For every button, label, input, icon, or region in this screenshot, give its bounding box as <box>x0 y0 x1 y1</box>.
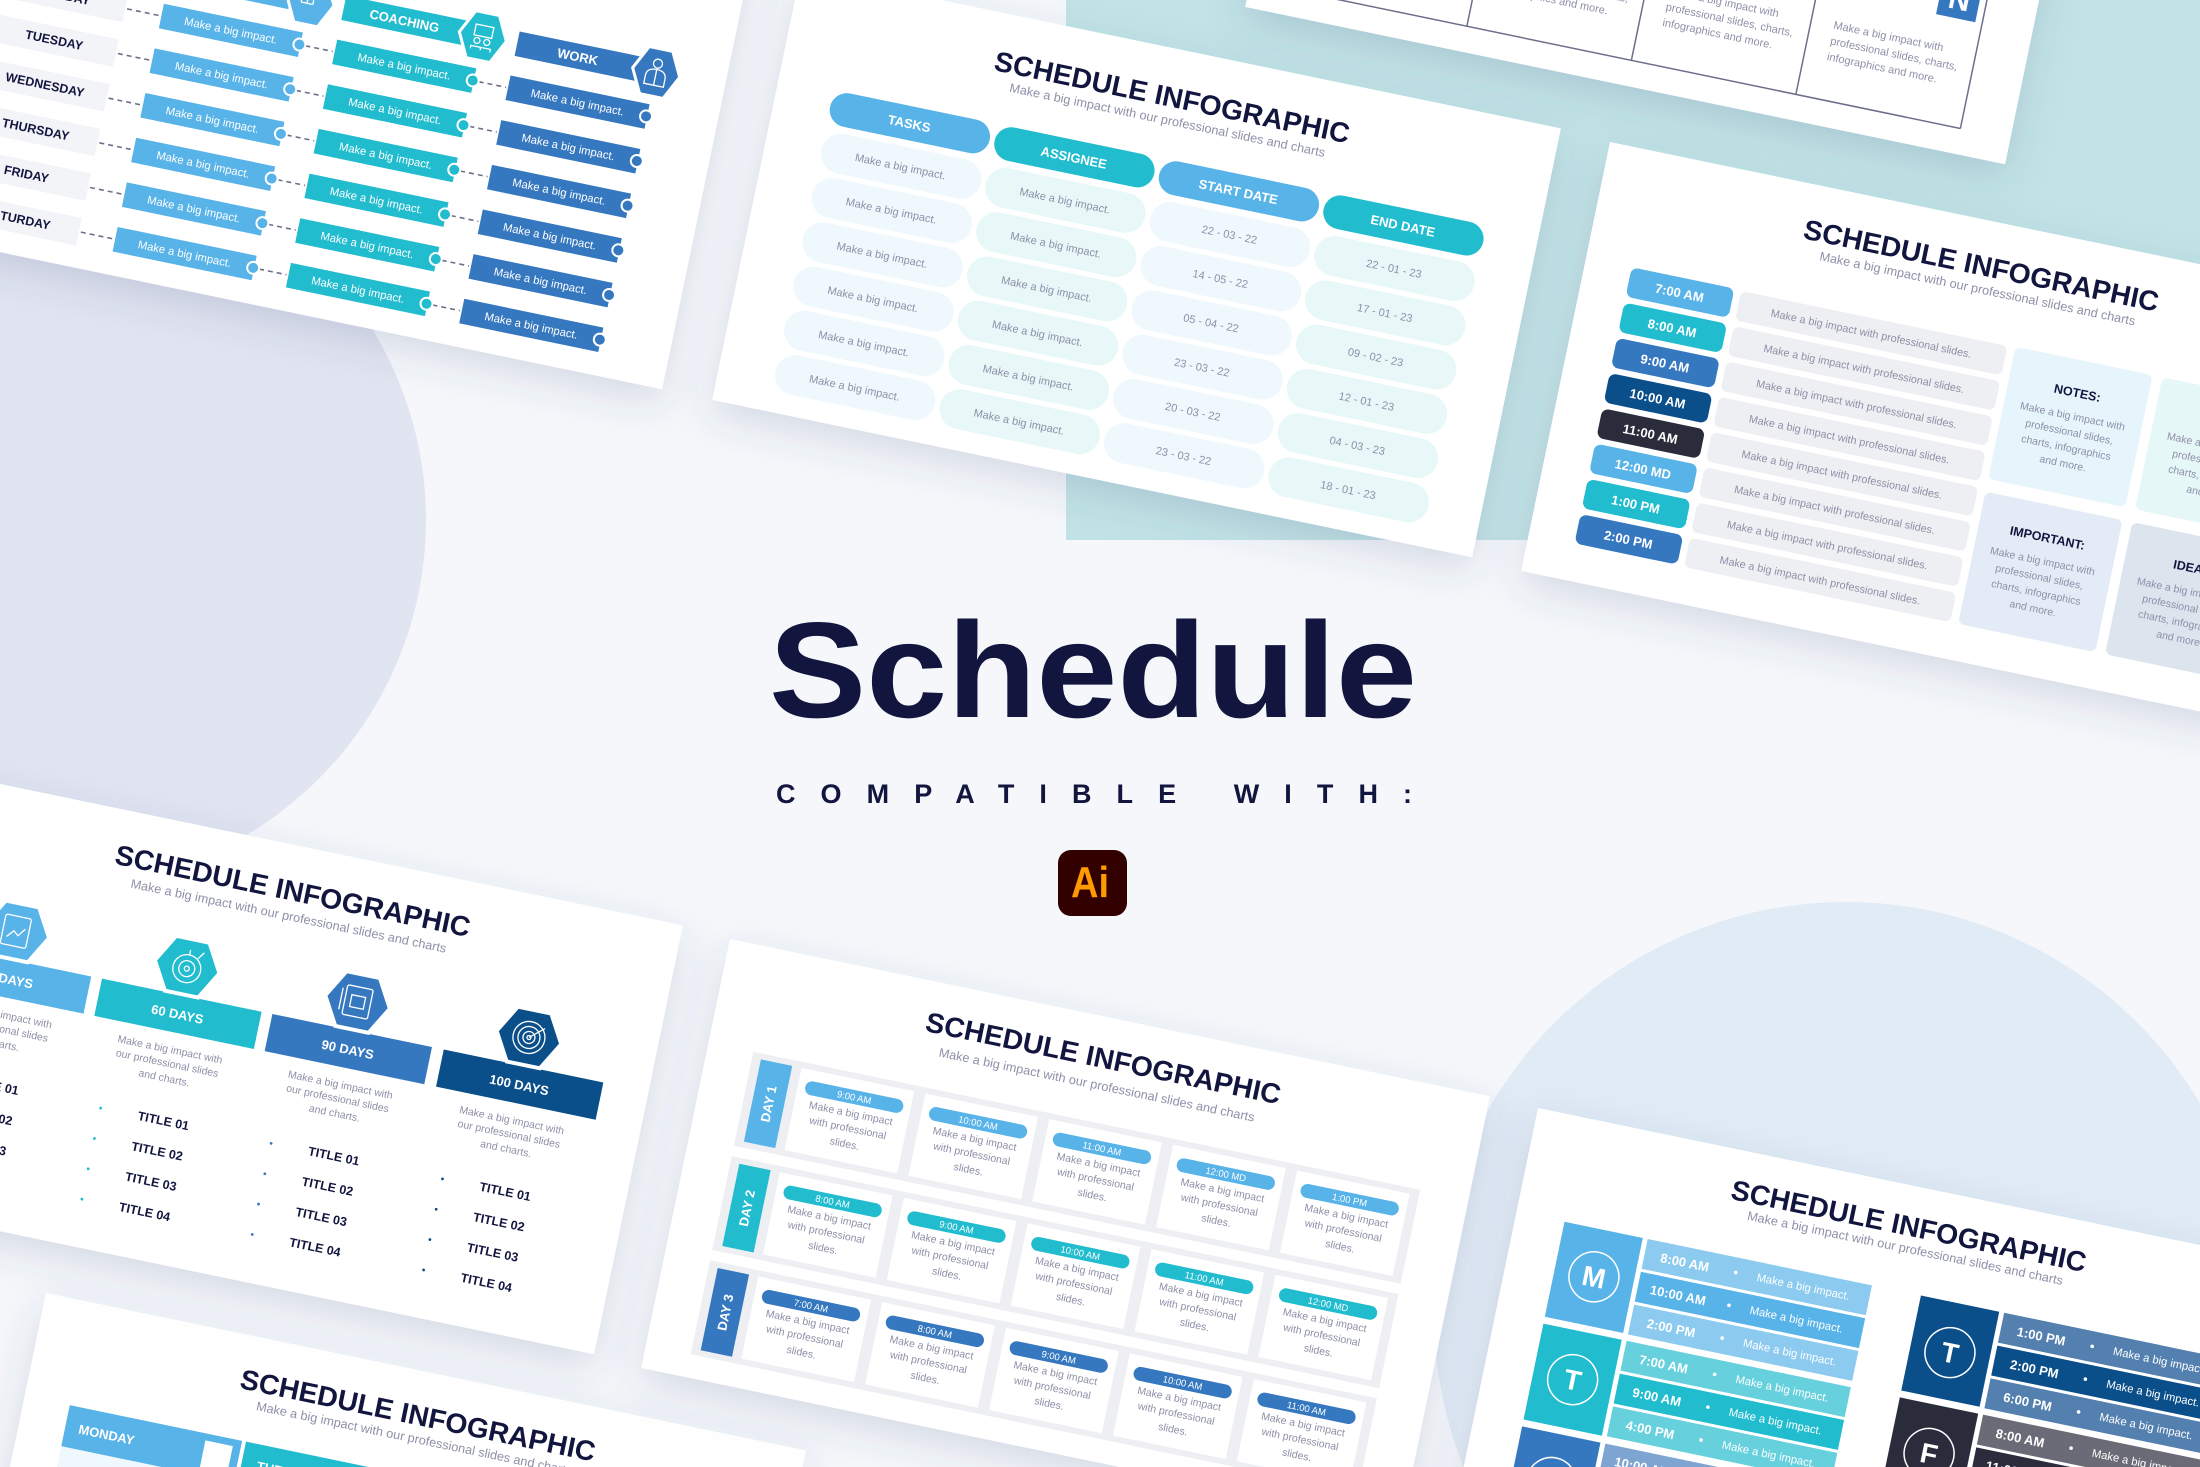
row: day 2: with professional <box>786 1219 866 1247</box>
note card: notes: and more. <box>2038 453 2087 474</box>
day labels: WEDNESDAY <box>4 70 86 100</box>
time pills: 7:00 AM <box>1654 281 1705 305</box>
column: 30 days <box>0 888 103 1199</box>
description rows: Make a big impact with professional slides. <box>1740 449 1943 502</box>
time pills <box>1574 267 1734 565</box>
column text 3: infographics and more. <box>1826 51 1938 86</box>
row: day 1: DAY 1 <box>757 1084 780 1123</box>
row: day 2: 11:00 AM <box>1184 1270 1225 1289</box>
column: monday: MONDAY <box>77 1422 136 1448</box>
column: 60 days: 60 DAYS <box>150 1001 205 1027</box>
time pills: 2:00 PM <box>1603 527 1654 552</box>
row: day 2: with professional <box>1033 1270 1113 1298</box>
row: day 1: Make a big impact <box>808 1099 894 1128</box>
column: assignee: Make a big impact. <box>1009 230 1102 261</box>
row: day 1: with professional <box>1055 1166 1135 1194</box>
row: day 1: Make a big impact <box>1056 1151 1142 1180</box>
column: tasks: Make a big impact. <box>845 196 938 227</box>
column: first activity: Make a big impact. <box>146 194 241 225</box>
description rows: Make a big impact with professional slides. <box>1726 519 1929 572</box>
slide title: SCHEDULE INFOGRAPHIC <box>238 1364 598 1467</box>
column: 100 days: TITLE 03 <box>466 1240 520 1265</box>
column: coaching: Make a big impact. <box>329 186 424 217</box>
block: tuesday <box>1524 1324 1851 1467</box>
column: first activity: Make a big impact. <box>155 150 251 181</box>
block: thursday: T <box>1938 1336 1961 1370</box>
column: start date: START DATE <box>1197 176 1280 207</box>
column: first activity: Make a big impact. <box>137 239 232 270</box>
row: day 2: 12:00 MD <box>1307 1295 1349 1315</box>
note card: notes <box>1988 347 2153 507</box>
column: coaching: Make a big impact. <box>338 141 433 172</box>
column: coaching: Make a big impact. <box>310 275 405 306</box>
time pills: 10:00 AM <box>1628 386 1687 412</box>
slide subtitle: Make a big impact with our professional slides and charts <box>129 877 448 956</box>
slide subtitle: Make a big impact with our professional slides and charts <box>1818 249 2137 328</box>
column: 90 days: TITLE 02 <box>301 1175 354 1199</box>
column: first activity: Make a big impact. <box>183 16 278 47</box>
block: tuesday: T <box>1561 1363 1584 1397</box>
column: end date: 04 - 03 - 23 <box>1328 435 1386 458</box>
block: tuesday: Make a big impact. <box>1728 1407 1823 1438</box>
row: day 2: 9:00 AM <box>938 1219 975 1237</box>
row: day 3 <box>691 1260 1377 1467</box>
description rows: Make a big impact with professional slides. <box>1770 308 1972 361</box>
block: monday: 10:00 AM <box>1649 1282 1707 1308</box>
row: day 3: 10:00 AM <box>1162 1374 1203 1393</box>
time pills: 1:00 PM <box>1610 492 1661 517</box>
column: 60 days: Make a big impact with <box>116 1033 224 1067</box>
column text 2: professional slides, charts, <box>1665 1 1794 39</box>
day labels: THURSDAY <box>1 116 71 144</box>
block: thursday: Make a big impact. <box>2105 1379 2200 1410</box>
row: day 2: slides. <box>1303 1342 1334 1360</box>
row: day 1: 12:00 MD <box>1204 1165 1247 1185</box>
block: tuesday: 4:00 PM <box>1624 1418 1676 1442</box>
block: friday <box>1880 1397 2200 1467</box>
row: day 2: with professional <box>1157 1296 1237 1324</box>
column: work: Make a big impact. <box>530 88 625 119</box>
block: thursday: 1:00 PM <box>2016 1324 2067 1349</box>
column: 60 days: TITLE 01 <box>136 1109 190 1133</box>
row: day 3: slides. <box>1157 1421 1189 1439</box>
column: 100 days: TITLE 01 <box>478 1180 532 1204</box>
column: 90 days <box>226 958 444 1269</box>
slide: day milestones <box>0 768 683 1354</box>
column: end date: 12 - 01 - 23 <box>1338 391 1395 414</box>
row: day 1: slides. <box>1076 1187 1108 1204</box>
row: day 3: 9:00 AM <box>1040 1349 1077 1367</box>
column: tasks <box>771 90 993 424</box>
column: assignee: Make a big impact. <box>982 363 1075 394</box>
subheading: compatible with: COMPATIBLE WITH: <box>776 779 1412 809</box>
column: tasks: Make a big impact. <box>836 240 928 271</box>
icon: person <box>644 57 669 87</box>
row: day 1: slides. <box>953 1161 984 1179</box>
note card: notes: Make a big impact with <box>2019 400 2126 433</box>
block: monday: Make a big impact. <box>1742 1338 1837 1369</box>
slide subtitle: Make a big impact with our professional slides and charts <box>1008 81 1326 160</box>
column: tasks: Make a big impact. <box>826 285 919 315</box>
column: end date: END DATE <box>1369 212 1437 240</box>
note card: important: professional slides, <box>1994 562 2084 592</box>
column: start date: 14 - 05 - 22 <box>1191 268 1249 291</box>
row: day 2: Make a big impact <box>786 1204 872 1233</box>
column: 100 days: TITLE 04 <box>459 1271 513 1295</box>
block: tuesday: 9:00 AM <box>1631 1385 1683 1409</box>
block: monday: Make a big impact. <box>1755 1272 1851 1303</box>
slide: top right notes table <box>1245 0 2094 164</box>
row: day 3: 7:00 AM <box>793 1298 829 1316</box>
column: assignee: ASSIGNEE <box>1039 144 1109 172</box>
row: day 3: slides. <box>785 1344 817 1362</box>
column: end date: 22 - 01 - 23 <box>1365 258 1423 281</box>
row: day 3: Make a big impact <box>1260 1410 1346 1439</box>
time pills: 12:00 MD <box>1613 456 1672 482</box>
row: day 1: Make a big impact <box>1303 1202 1389 1231</box>
row: day 1: 10:00 AM <box>957 1114 999 1133</box>
row: day 3: Make a big impact <box>1012 1359 1098 1388</box>
slide title: SCHEDULE INFOGRAPHIC <box>112 839 473 943</box>
description rows <box>1684 291 2007 622</box>
row: day 2 <box>712 1156 1399 1388</box>
column: first activity: Make a big impact. <box>165 105 260 136</box>
row: day 1: with professional <box>1303 1217 1383 1245</box>
row: day 2: with professional <box>1281 1321 1361 1349</box>
column: assignee: Make a big impact. <box>1018 186 1111 217</box>
dashed connectors <box>81 9 506 311</box>
column: 90 days: Make a big impact with <box>287 1069 394 1102</box>
column: work: Make a big impact. <box>502 222 597 253</box>
note card: important: IMPORTANT: <box>2009 524 2086 553</box>
table grid lines <box>1302 0 1997 128</box>
icon: target <box>510 1019 548 1056</box>
note card: notes: professional slides, <box>2024 417 2114 447</box>
column: 100 days: TITLE 02 <box>472 1210 526 1234</box>
row: day 3: Make a big impact <box>1136 1385 1222 1414</box>
row: day 2: slides. <box>807 1240 839 1257</box>
row: day 3: with professional <box>1260 1426 1340 1453</box>
note card: ideas <box>2105 522 2200 683</box>
column: end date: 18 - 01 - 23 <box>1319 479 1377 502</box>
column: assignee: Make a big impact. <box>973 407 1065 438</box>
column: 100 days: and charts. <box>479 1138 532 1160</box>
main heading: Schedule: Schedule <box>769 594 1417 746</box>
column text 2: infographics and more. <box>1661 17 1773 51</box>
slide: weekly grid bottom left <box>0 1293 806 1467</box>
column: tasks: Make a big impact. <box>808 373 901 404</box>
background panel: teal <box>1066 0 2200 540</box>
slide: tasks table <box>712 0 1561 557</box>
column: work: Make a big impact. <box>511 177 606 208</box>
column: start date: 20 - 03 - 22 <box>1164 401 1221 424</box>
block: tuesday: 7:00 AM <box>1638 1352 1689 1377</box>
column: assignee: Make a big impact. <box>991 319 1084 349</box>
block: tuesday: Make a big impact. <box>1734 1374 1830 1405</box>
row: day 2: Make a big impact <box>1282 1306 1368 1335</box>
icon: stopwatch <box>170 947 204 985</box>
row: day 1 <box>734 1052 1420 1284</box>
column: start date <box>1100 158 1322 492</box>
slide subtitle: Make a big impact with our professional slides and charts <box>938 1046 1256 1125</box>
row: day 2: slides. <box>931 1265 963 1283</box>
column: coaching: Make a big impact. <box>356 52 452 83</box>
row: day 2: slides. <box>1179 1316 1210 1334</box>
column: 90 days: TITLE 01 <box>307 1144 361 1169</box>
note card: important: and more. <box>2008 598 2057 619</box>
slide title: SCHEDULE INFOGRAPHIC <box>1801 214 2162 317</box>
column: work: Make a big impact. <box>483 311 579 342</box>
column: tasks: Make a big impact. <box>854 152 947 182</box>
note card: notes: charts, infographics <box>2020 433 2112 463</box>
block: monday: M <box>1579 1260 1608 1295</box>
row: day 1: 1:00 PM <box>1331 1192 1368 1210</box>
row: day 1: with professional <box>807 1114 887 1142</box>
column: first activity <box>113 0 339 285</box>
row: day 1: slides. <box>1200 1212 1232 1230</box>
time pills: 11:00 AM <box>1621 421 1679 447</box>
note card: second <box>2135 377 2200 538</box>
row: day 3: with professional <box>764 1323 844 1351</box>
row: day 1: with professional <box>1179 1191 1259 1219</box>
column: start date: 22 - 03 - 22 <box>1201 224 1258 247</box>
row: day 3: slides. <box>1281 1446 1313 1464</box>
column: tasks: Make a big impact. <box>817 329 910 359</box>
column: work: WORK <box>556 45 600 68</box>
slide: hourly timetable with notes <box>1521 142 2200 728</box>
column: first activity: Make a big impact. <box>174 61 269 91</box>
row: day 3: 8:00 AM <box>917 1323 953 1341</box>
column: 60 days: TITLE 04 <box>118 1200 172 1224</box>
column: tasks: TASKS <box>887 112 932 135</box>
row: day 3: slides. <box>1033 1395 1065 1413</box>
column: 100 days <box>398 994 615 1305</box>
note card: notes: NOTES: <box>2053 382 2102 405</box>
icon: planner <box>338 984 373 1019</box>
icon: coaching <box>470 24 495 52</box>
row: day 3: Make a big impact <box>765 1308 851 1337</box>
description rows: Make a big impact with professional slides. <box>1733 484 1936 537</box>
column: coaching: COACHING <box>368 6 441 35</box>
time pills: 9:00 AM <box>1639 351 1691 376</box>
row: day 2: slides. <box>1055 1291 1086 1309</box>
icon: Adobe Illustrator: Ai <box>1071 858 1109 907</box>
column: start date: 23 - 03 - 22 <box>1155 445 1212 468</box>
column: tuesday <box>197 1442 418 1467</box>
column: work <box>459 20 685 357</box>
column: 90 days: and charts. <box>308 1102 361 1125</box>
description rows: Make a big impact with professional slides. <box>1719 554 1921 608</box>
column: coaching: Make a big impact. <box>319 230 415 261</box>
column: end date <box>1265 192 1487 526</box>
column: 100 days: 100 DAYS <box>488 1072 550 1098</box>
row: day 1: 9:00 AM <box>836 1089 872 1107</box>
column: 60 days: our professional slides <box>115 1047 219 1080</box>
column: assignee <box>936 124 1158 458</box>
row: day 2: DAY 2 <box>736 1189 758 1228</box>
block: monday: 2:00 PM <box>1646 1316 1697 1340</box>
column: 60 days: TITLE 03 <box>124 1170 178 1194</box>
block: thursday: 6:00 PM <box>2002 1390 2053 1414</box>
row: day 3: DAY 3 <box>714 1293 736 1332</box>
time pills: 8:00 AM <box>1646 316 1698 341</box>
day labels: FRIDAY <box>3 163 51 186</box>
slide: weekly days table <box>0 0 751 389</box>
letter badge N <box>1936 0 1985 22</box>
block: thursday: Make a big impact. <box>2098 1411 2194 1442</box>
background circle: left lavender <box>0 154 426 886</box>
row: day 2: Make a big impact <box>1158 1281 1244 1310</box>
column: work: Make a big impact. <box>520 132 616 163</box>
column: 90 days: TITLE 03 <box>294 1205 348 1229</box>
block: friday: 8:00 AM <box>1994 1426 2046 1450</box>
slide: letter day blocks <box>1449 1108 2200 1467</box>
background circle: bottom right blue <box>1434 902 2200 1467</box>
row: day 1: with professional <box>931 1140 1011 1168</box>
column: coaching <box>286 0 511 321</box>
row: day 3: 11:00 AM <box>1286 1400 1327 1419</box>
description rows: Make a big impact with professional slides. <box>1755 378 1958 431</box>
block: wednesday <box>1502 1426 1830 1467</box>
column: end date: 17 - 01 - 23 <box>1356 302 1413 325</box>
block: monday: 8:00 AM <box>1659 1250 1710 1275</box>
slide title: SCHEDULE INFOGRAPHIC <box>923 1006 1284 1110</box>
slide subtitle: Make a big impact with our professional slides and charts <box>1746 1209 2064 1288</box>
day labels <box>0 0 128 245</box>
icon: report <box>0 914 32 949</box>
icon: Adobe Illustrator <box>1058 850 1127 916</box>
row: day 1: slides. <box>1324 1238 1356 1256</box>
day labels: TUESDAY <box>24 28 85 53</box>
row: day 2: with professional <box>910 1244 990 1272</box>
column: 60 days: and charts. <box>137 1067 191 1089</box>
row: day 2: 8:00 AM <box>814 1193 851 1211</box>
block: monday: Make a big impact. <box>1749 1305 1844 1336</box>
block: thursday <box>1901 1296 2200 1455</box>
column: monday <box>21 1405 242 1467</box>
column: 60 days: TITLE 02 <box>130 1139 184 1164</box>
description rows: Make a big impact with professional slides. <box>1762 343 1965 396</box>
column: end date: 09 - 02 - 23 <box>1347 346 1404 370</box>
row: day 3: with professional <box>1136 1400 1216 1428</box>
column: 100 days: our professional slides <box>456 1118 561 1151</box>
row: day 1: slides. <box>829 1135 860 1153</box>
block: monday <box>1545 1222 1872 1381</box>
column: 100 days: Make a big impact with <box>458 1104 565 1137</box>
column: assignee: Make a big impact. <box>1000 275 1093 305</box>
column: work: Make a big impact. <box>493 266 588 297</box>
row: day 3: slides. <box>909 1369 941 1387</box>
row: day 3: with professional <box>888 1349 968 1376</box>
column: start date: 23 - 03 - 22 <box>1173 357 1231 380</box>
row: day 1: 11:00 AM <box>1081 1140 1122 1159</box>
row: day 2: Make a big impact <box>910 1229 996 1258</box>
row: day 2: Make a big impact <box>1034 1255 1120 1284</box>
column: start date: 05 - 04 - 22 <box>1182 312 1240 335</box>
note card: important: Make a big impact with <box>1989 545 2096 578</box>
column: 60 days <box>56 923 273 1234</box>
row: day 3: Make a big impact <box>889 1333 974 1363</box>
column text 3: professional slides, charts, <box>1829 35 1959 73</box>
column: coaching: Make a big impact. <box>347 96 442 127</box>
description rows: Make a big impact with professional slides. <box>1748 413 1951 467</box>
column: 90 days: our professional slides <box>285 1082 390 1115</box>
column: 90 days: 90 DAYS <box>320 1037 376 1062</box>
row: day 3: with professional <box>1012 1374 1092 1402</box>
slide: three day agenda <box>641 939 1490 1467</box>
slide title: SCHEDULE INFOGRAPHIC <box>992 45 1352 149</box>
column text 3: Make a big impact with <box>1832 20 1944 54</box>
block: thursday: 2:00 PM <box>2009 1357 2060 1381</box>
note card: important: charts, infographics <box>1990 578 2082 608</box>
row: day 2: 10:00 AM <box>1059 1244 1101 1263</box>
row: day 1: Make a big impact <box>1179 1176 1265 1205</box>
row: day 1: Make a big impact <box>932 1125 1018 1154</box>
column: 90 days: TITLE 04 <box>288 1235 342 1260</box>
slide title: SCHEDULE INFOGRAPHIC <box>1728 1174 2089 1278</box>
note card: important <box>1958 492 2123 652</box>
